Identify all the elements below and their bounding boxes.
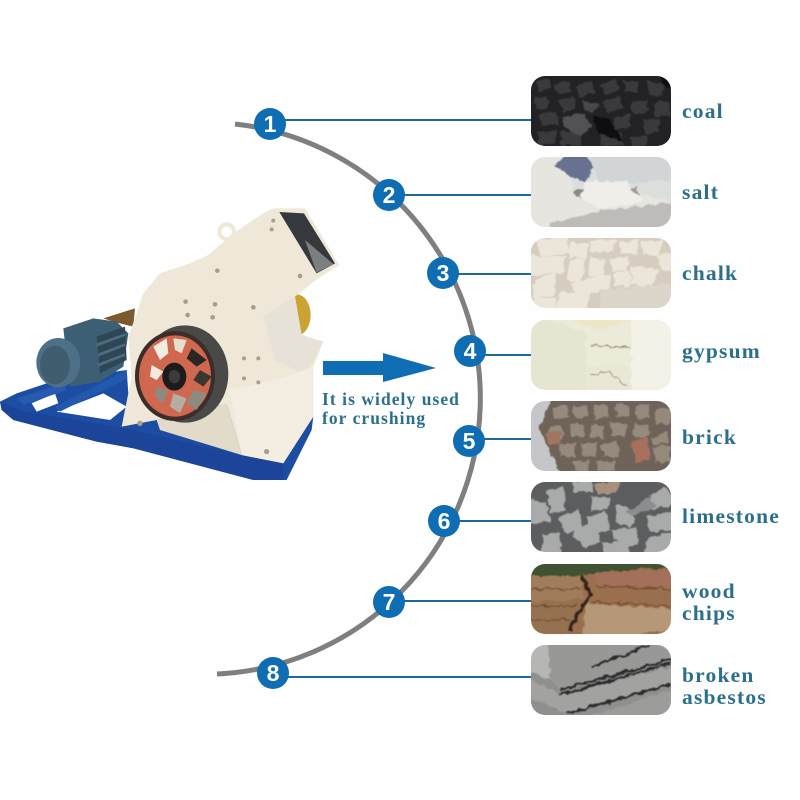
flywheel xyxy=(135,325,228,423)
label: broken asbestos xyxy=(682,663,767,709)
marker 5: 5 xyxy=(463,428,476,454)
marker 7: 7 xyxy=(383,589,395,615)
photo: salt xyxy=(531,157,671,227)
marker 4 xyxy=(454,335,486,367)
hammer crusher machine illustration xyxy=(0,208,339,480)
marker 1: 1 xyxy=(264,111,277,137)
connector lines xyxy=(270,120,531,677)
photo: broken asbestos xyxy=(531,645,671,715)
bolts xyxy=(137,219,302,454)
label: salt: salt xyxy=(682,180,719,204)
label: broken asbestos: broken xyxy=(682,663,755,687)
photo: gypsum xyxy=(531,320,671,390)
marker 4: 4 xyxy=(464,338,477,364)
label: limestone: limestone xyxy=(682,504,780,528)
marker 8: 8 xyxy=(267,660,280,686)
photo: wood chips xyxy=(531,564,671,634)
label: wood chips: wood xyxy=(682,579,736,603)
label: coal: coal xyxy=(682,99,724,123)
label: wood chips: chips xyxy=(682,601,736,625)
photo: coal xyxy=(531,76,671,146)
label: brick: brick xyxy=(682,425,737,449)
caption: It is widely used for crushing: It is widely used xyxy=(322,389,460,409)
label: chalk: chalk xyxy=(682,261,738,285)
marker 6: 6 xyxy=(438,508,450,534)
photo: limestone xyxy=(531,482,671,552)
label: wood chips xyxy=(682,579,736,625)
cream machine body xyxy=(122,208,339,463)
marker 1 xyxy=(254,108,286,140)
marker 2: 2 xyxy=(383,182,395,208)
arrow pointing to materials xyxy=(323,353,436,382)
curved arc connecting numbered markers xyxy=(217,124,480,674)
caption: It is widely used for crushing: for crushing xyxy=(322,408,426,428)
marker 3: 3 xyxy=(437,260,449,286)
marker 7 xyxy=(373,586,405,618)
marker 3 xyxy=(427,257,459,289)
marker 2 xyxy=(373,179,405,211)
feed hopper xyxy=(279,212,335,273)
label: broken asbestos: asbestos xyxy=(682,685,767,709)
marker 8 xyxy=(257,657,289,689)
blue base frame xyxy=(0,370,313,480)
photo: chalk xyxy=(531,238,671,308)
yellow pulley behind xyxy=(283,294,311,336)
label: gypsum: gypsum xyxy=(682,339,761,363)
photo: brick xyxy=(531,401,671,471)
caption: It is widely used for crushing xyxy=(322,389,460,428)
motor xyxy=(36,308,135,387)
marker 6 xyxy=(428,505,460,537)
marker 5 xyxy=(453,425,485,457)
